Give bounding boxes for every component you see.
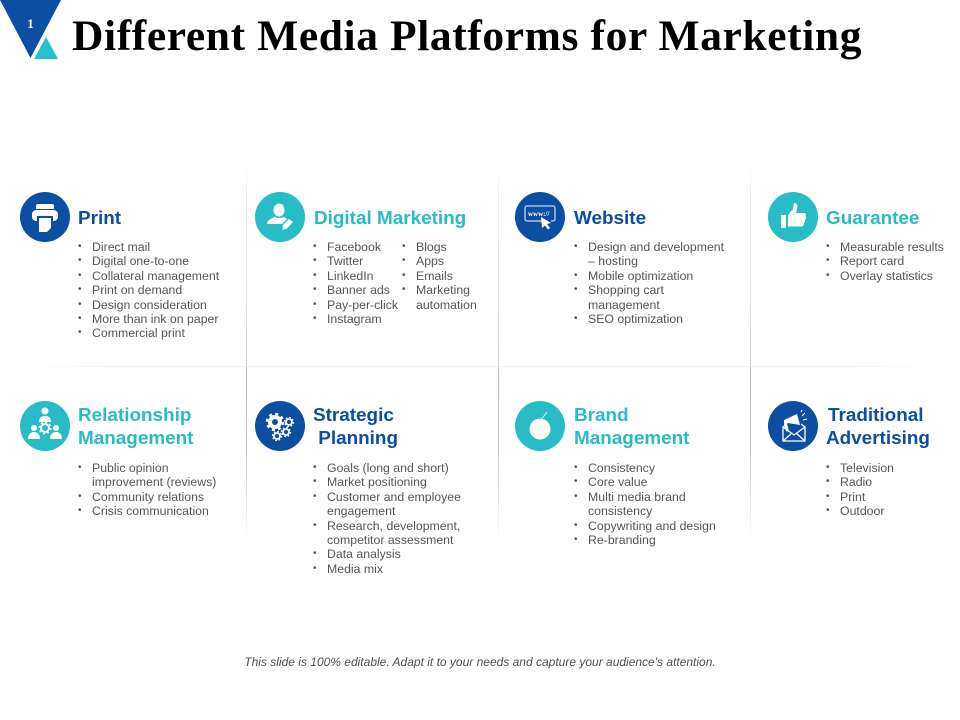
list: digital marketing column 1: Twitter	[327, 254, 363, 268]
heading: brand management	[574, 405, 690, 449]
list: brand management: Re-branding	[588, 533, 656, 547]
heading: strategic planning: Planning	[318, 428, 398, 449]
list: strategic planning: Market positioning	[327, 475, 427, 489]
panel: traditional advertising	[768, 401, 930, 518]
list: website: Shopping cart	[588, 283, 664, 297]
icon: www cursor: www://	[528, 210, 550, 218]
list: relationship management: Community relations	[92, 490, 204, 504]
list: traditional advertising: Outdoor	[840, 504, 884, 518]
icon: megaphone and envelope	[768, 401, 818, 451]
list: guarantee: Report card	[840, 254, 904, 268]
list: digital marketing column 1	[313, 240, 398, 326]
panel: strategic planning	[255, 401, 461, 576]
list: website: Mobile optimization	[588, 269, 693, 283]
heading: traditional advertising: Traditional	[828, 405, 924, 426]
heading: brand management: Brand	[574, 405, 629, 426]
heading: guarantee: Guarantee	[826, 208, 919, 229]
panel: relationship management	[20, 401, 216, 518]
list: brand management	[574, 461, 716, 547]
heading: print: Print	[78, 208, 121, 229]
list: print: Digital one-to-one	[92, 254, 189, 268]
list: print: More than ink on paper	[92, 312, 218, 326]
heading: strategic planning	[313, 405, 398, 449]
footer note: This slide is 100% editable. Adapt it to your needs and capture your audience's attention.	[244, 655, 716, 669]
list: digital marketing column 1: LinkedIn	[327, 269, 374, 283]
list: print: Collateral management	[92, 269, 219, 283]
list: strategic planning: Customer and employee	[327, 490, 461, 504]
list: strategic planning: Media mix	[327, 562, 383, 576]
list: guarantee	[826, 240, 944, 283]
list: print: Design consideration	[92, 298, 207, 312]
heading: relationship management: Relationship	[78, 405, 191, 426]
list: print: Print on demand	[92, 283, 182, 297]
list: digital marketing column 2: Blogs	[416, 240, 447, 254]
list: relationship management: Public opinion	[92, 461, 169, 475]
heading: traditional advertising	[826, 405, 930, 449]
list: digital marketing column 1: Facebook	[327, 240, 381, 254]
list: strategic planning: competitor assessment	[327, 533, 453, 547]
list: traditional advertising: Radio	[840, 475, 872, 489]
list: website: – hosting	[588, 254, 638, 268]
list: brand management: consistency	[588, 504, 652, 518]
list: guarantee: Overlay statistics	[840, 269, 933, 283]
list: digital marketing column 1: Banner ads	[327, 283, 390, 297]
icon: gears	[255, 401, 305, 451]
icon: team with gear	[20, 401, 70, 451]
heading: traditional advertising: Advertising	[826, 428, 930, 449]
list: brand management: Multi media brand	[588, 490, 686, 504]
list: website: Design and development	[588, 240, 724, 254]
logo: triangles with slide number: 1	[27, 16, 34, 31]
panel: website	[515, 192, 724, 326]
list: relationship management	[78, 461, 216, 518]
list: digital marketing column 2: Emails	[416, 269, 453, 283]
list: traditional advertising: Television	[840, 461, 894, 475]
icon: bomb	[515, 401, 565, 451]
panel: print	[20, 192, 220, 340]
logo: triangles with slide number	[0, 0, 61, 59]
list: strategic planning: engagement	[327, 504, 395, 518]
icon: person with pen	[255, 192, 305, 242]
icon: printer	[20, 192, 70, 242]
list: digital marketing column 2: automation	[416, 298, 477, 312]
heading: strategic planning: Strategic	[313, 405, 394, 426]
list: print: Commercial print	[92, 326, 185, 340]
list: strategic planning	[313, 461, 461, 576]
list: print	[78, 240, 220, 340]
list: digital marketing column 1: Instagram	[327, 312, 382, 326]
icon: www cursor	[515, 192, 565, 242]
list: traditional advertising: Print	[840, 490, 865, 504]
panel: guarantee	[768, 192, 944, 283]
list: strategic planning: Goals (long and short)	[327, 461, 449, 475]
list: traditional advertising	[826, 461, 894, 518]
list: brand management: Copywriting and design	[588, 519, 716, 533]
icon: thumbs up	[768, 192, 818, 242]
list: relationship management: improvement (reviews)	[92, 475, 216, 489]
heading: website: Website	[574, 208, 646, 229]
list: website: SEO optimization	[588, 312, 683, 326]
title: Different Media Platforms for Marketing	[72, 12, 862, 60]
list: brand management: Core value	[588, 475, 647, 489]
list: website: management	[588, 298, 660, 312]
list: digital marketing column 2	[402, 240, 477, 312]
heading: brand management: Management	[574, 428, 689, 449]
list: brand management: Consistency	[588, 461, 655, 475]
panel: digital marketing	[255, 192, 477, 326]
list: print: Direct mail	[92, 240, 150, 254]
heading: digital marketing: Digital Marketing	[314, 208, 466, 229]
list: strategic planning: Data analysis	[327, 547, 401, 561]
list: guarantee: Measurable results	[840, 240, 944, 254]
heading: relationship management: Management	[78, 428, 193, 449]
heading: relationship management	[78, 405, 194, 449]
list: digital marketing column 1: Pay-per-click	[327, 298, 398, 312]
list: digital marketing column 2: Marketing	[416, 283, 470, 297]
list: digital marketing column 2: Apps	[416, 254, 444, 268]
list: website	[574, 240, 724, 326]
list: strategic planning: Research, development,	[327, 519, 460, 533]
panel: brand management	[515, 401, 716, 547]
list: relationship management: Crisis communication	[92, 504, 209, 518]
